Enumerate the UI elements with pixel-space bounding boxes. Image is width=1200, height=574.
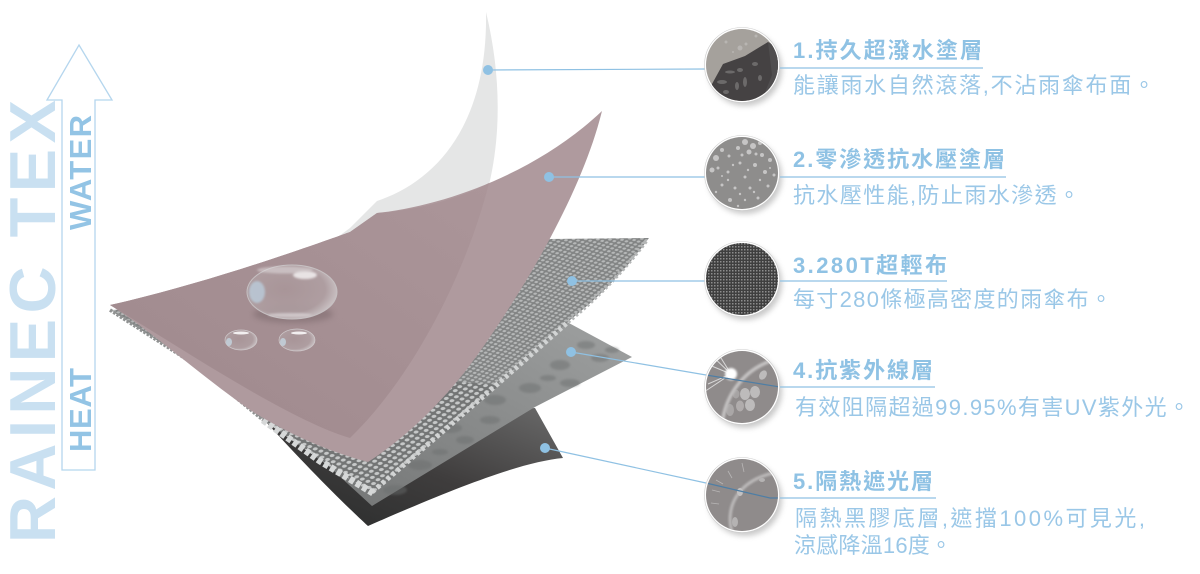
icon: water beading on fabric [700, 25, 784, 106]
description: 涼感降溫16度。 [794, 533, 952, 558]
water drop: large [247, 265, 337, 323]
icon: sun flare on hex film [700, 345, 784, 429]
layer: UV hex film [300, 322, 632, 506]
leader line 3 [567, 276, 706, 286]
description [794, 506, 1145, 558]
heading: 1.持久超潑水塗層 [793, 38, 982, 63]
water drop: small right [279, 329, 315, 351]
description: 能讓雨水自然滾落,不沾雨傘布面。 [793, 73, 1155, 98]
heading: 4.抗紫外線層 [793, 358, 933, 383]
layer: pink waterproof coating [110, 111, 602, 462]
item 5: heat-insulating blackout layer [700, 455, 1145, 558]
item 3: 280T ultra-light fabric [704, 242, 1112, 320]
heading: 2.零滲透抗水壓塗層 [793, 147, 1005, 172]
item 1: durable water repellent coating [700, 25, 1155, 106]
label: HEAT: HEAT [63, 368, 98, 452]
leader line 5 [540, 443, 706, 483]
heading: 5.隔熱遮光層 [793, 469, 933, 494]
fabric layer stack [110, 12, 649, 526]
icon: droplets [700, 130, 784, 214]
layer: 280T woven fabric [110, 238, 649, 494]
layer: top hydrophobic coating (light grey) [320, 12, 498, 250]
description: 有效阻隔超過99.95%有害UV紫外光。 [795, 395, 1190, 420]
arrow: heat to water direction [47, 45, 112, 470]
item 2: zero-penetration hydrostatic coating [700, 130, 1080, 214]
item 4: UV protection layer [700, 345, 1190, 429]
icon: mesh fabric [704, 242, 782, 320]
leader line 2 [544, 172, 706, 182]
description: 隔熱黑膠底層,遮擋100%可見光, [795, 506, 1145, 531]
leader line 1 [483, 65, 706, 75]
description: 每寸280條極高密度的雨傘布。 [793, 287, 1112, 312]
water drop: small left [225, 330, 257, 350]
layer: black coating [267, 408, 563, 526]
leader line 4 [566, 347, 706, 375]
heading: 3.280T超輕布 [793, 253, 947, 278]
icon: insulating arc [700, 455, 784, 539]
description: 抗水壓性能,防止雨水滲透。 [793, 183, 1080, 208]
label: WATER: WATER [63, 115, 98, 230]
